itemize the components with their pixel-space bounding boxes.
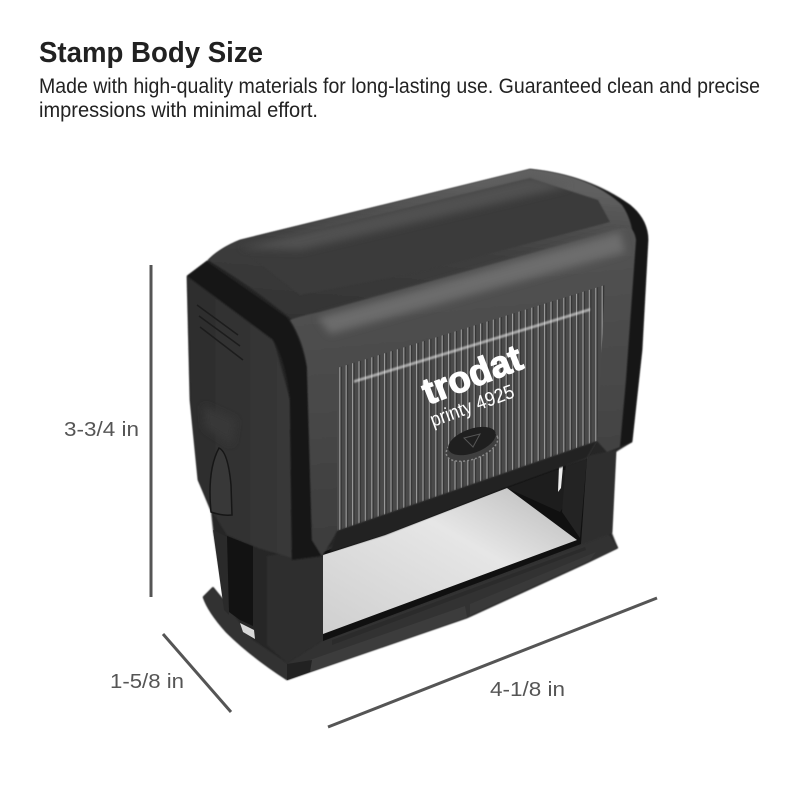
depth dimension line: [163, 634, 231, 712]
model line: printy 4925: [427, 381, 517, 432]
front button: [442, 421, 502, 467]
window frame: [323, 457, 587, 641]
height dimension line: [150, 265, 152, 597]
black corner band: [187, 261, 322, 560]
side marking: [203, 405, 236, 445]
width dimension line: [328, 598, 657, 727]
left side slot: [213, 530, 255, 639]
width label: 4-1/8 in: [490, 679, 565, 701]
lower frame body: [267, 450, 616, 663]
stamp silhouette: [187, 169, 648, 680]
top cover highlight panel: [240, 178, 610, 295]
top cover: [208, 169, 634, 350]
cover lower shadow strip: [330, 441, 597, 552]
inner mechanism: [507, 470, 568, 512]
logo: [416, 337, 528, 432]
cover highlight band: [318, 232, 625, 334]
stamp illustration: [187, 169, 648, 680]
ribbed panel: [330, 280, 610, 540]
infographic canvas: [40, 41, 760, 728]
depth label: 1-5/8 in: [110, 671, 184, 693]
description text: Made with high-quality materials for long-lasting use. Guaranteed clean and precise: [39, 75, 760, 98]
ribbed panel shine: [354, 308, 590, 383]
left side housing: [187, 276, 292, 558]
side vents: [197, 305, 243, 360]
window paper: [323, 488, 577, 634]
height label: 3-3/4 in: [64, 419, 139, 441]
logo wordmark: trodat: [416, 337, 528, 412]
front cover: [290, 228, 636, 556]
title: Stamp Body Size: [39, 37, 263, 69]
description text: impressions with minimal effort.: [39, 99, 318, 122]
side latch: [210, 448, 232, 515]
dark rear shell: [530, 170, 648, 448]
description text: [39, 75, 760, 122]
stamp base foot: [203, 533, 618, 680]
